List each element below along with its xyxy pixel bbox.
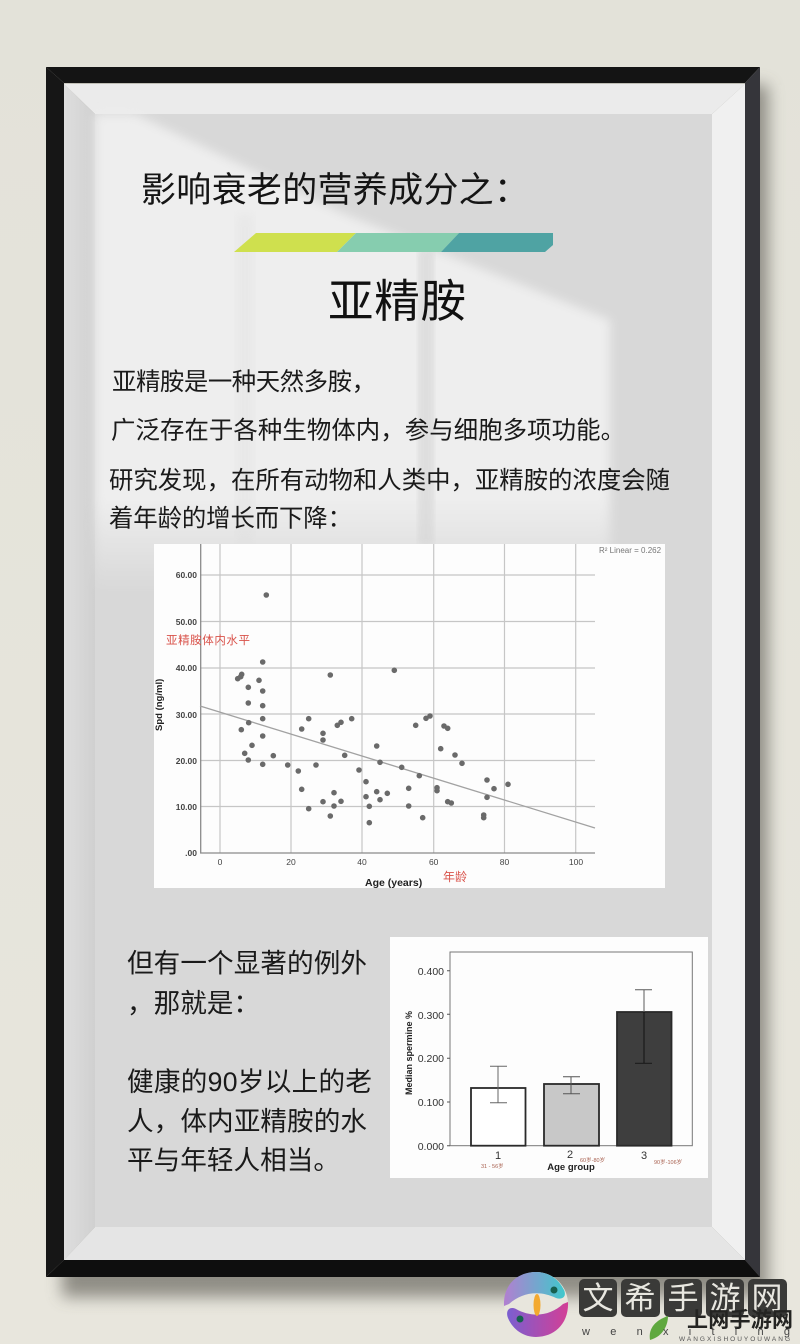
x axis title: Age (years): [365, 877, 422, 889]
regression line: [200, 706, 595, 828]
bar chart: median spermine by age group: [390, 937, 708, 1178]
window shadow band left: [236, 215, 254, 545]
latin brand line: wenxiting: [581, 1326, 790, 1338]
y axis tick labels: 50.00: [176, 617, 197, 627]
decorative tri-colour bar: [234, 233, 553, 252]
intro text block: 广泛存在于各种生物体内，参与细胞多项功能。: [111, 418, 625, 444]
intro text block: 着年龄的增长而下降：: [109, 506, 352, 532]
red age range labels: 31 - 56岁: [481, 1162, 504, 1170]
exception text block: 人，体内亚精胺的水: [127, 1106, 367, 1136]
y axis title: Spd (ng/ml): [154, 679, 165, 731]
y tick labels: 0.400: [418, 966, 444, 978]
data points: [235, 592, 511, 826]
x axis tick labels: [218, 857, 583, 867]
overlaid dark brand text: 上网手游网: [687, 1309, 793, 1332]
red label: spermidine level: 亚精胺体内水平: [166, 633, 250, 647]
y axis tick labels: 20.00: [176, 756, 197, 766]
x tick labels: [495, 1149, 647, 1162]
exception text block: 平与年轻人相当。: [127, 1146, 340, 1176]
x axis tick labels: 40: [357, 857, 367, 867]
brand name blocks: 网: [752, 1281, 782, 1316]
small brand line: WANGXISHOUYOUWANG: [679, 1336, 790, 1343]
intro text block: [109, 369, 670, 532]
exception text block: 健康的90岁以上的老: [127, 1067, 372, 1097]
watermark: [504, 1272, 793, 1343]
y tick labels: [418, 966, 444, 1153]
frame bottom edge: [46, 1260, 760, 1277]
brand name blocks: 手: [668, 1281, 698, 1316]
axes: [201, 544, 595, 853]
title: 影响衰老的营养成分之：: [141, 171, 529, 210]
frame shadow: [62, 85, 768, 1297]
error bars: [490, 990, 652, 1103]
x axis tick labels: 100: [569, 857, 583, 867]
x axis tick labels: 20: [286, 857, 296, 867]
y axis tick labels: 40.00: [176, 663, 197, 673]
exception text block: 但有一个显著的例外: [127, 948, 367, 978]
exception text block: ，那就是：: [127, 988, 260, 1018]
brand name blocks: 文: [582, 1281, 614, 1316]
y axis tick labels: 60.00: [176, 570, 197, 580]
r squared label: R² Linear = 0.262: [599, 546, 662, 555]
bar 2: [544, 1084, 599, 1146]
x axis tick labels: 80: [500, 857, 509, 867]
red age range labels: [481, 1156, 682, 1170]
y axis tick labels: .00: [185, 848, 197, 858]
mat top bevel: [64, 84, 745, 114]
frame top edge: [46, 67, 760, 83]
y axis tick labels: [176, 570, 197, 858]
x tick labels: 2: [567, 1149, 573, 1161]
mat left bevel: [64, 84, 95, 1260]
grid lines: [200, 544, 595, 853]
frame right edge: [745, 67, 760, 1277]
y axis tick labels: 30.00: [176, 710, 197, 720]
red label: age: 年龄: [443, 870, 467, 884]
y tick labels: 0.000: [418, 1141, 444, 1153]
brand name blocks: 游: [710, 1281, 740, 1316]
x tick labels: 1: [495, 1150, 501, 1162]
brand name blocks: 希: [624, 1281, 656, 1316]
bar 1: [471, 1088, 526, 1146]
x axis title: Age group: [547, 1162, 595, 1173]
y tick labels: 0.100: [418, 1097, 444, 1109]
y axis title: Median spermine %: [404, 1011, 414, 1095]
intro text block: 亚精胺是一种天然多胺，: [112, 369, 376, 396]
scatter chart: spermidine level vs age: [154, 544, 665, 889]
y tick labels: 0.200: [418, 1053, 444, 1065]
exception text block: [127, 948, 372, 1176]
window shadow band centre: [418, 250, 434, 545]
x tick labels: 3: [641, 1150, 647, 1162]
x axis tick labels: 60: [429, 857, 439, 867]
red age range labels: 60岁-80岁: [580, 1156, 605, 1164]
y axis tick labels: 10.00: [176, 802, 197, 812]
icon: green leaf: [650, 1316, 668, 1340]
bar 3: [617, 1012, 672, 1146]
mat right bevel: [712, 84, 745, 1260]
window light patch: [95, 114, 610, 600]
brand name blocks: [579, 1279, 787, 1317]
y ticks: [447, 971, 450, 1146]
frame left edge: [46, 67, 64, 1277]
red age range labels: 90岁-106岁: [654, 1158, 682, 1166]
intro text block: 研究发现，在所有动物和人类中，亚精胺的浓度会随: [109, 468, 670, 494]
x axis tick labels: 0: [218, 857, 223, 867]
plot box: [450, 952, 692, 1146]
y tick labels: 0.300: [418, 1010, 444, 1022]
inner mat panel with window light: [95, 114, 712, 1227]
heading: spermidine: 亚精胺: [328, 276, 466, 327]
icon: swirl logo: [504, 1272, 568, 1337]
mat bottom bevel: [64, 1227, 745, 1260]
